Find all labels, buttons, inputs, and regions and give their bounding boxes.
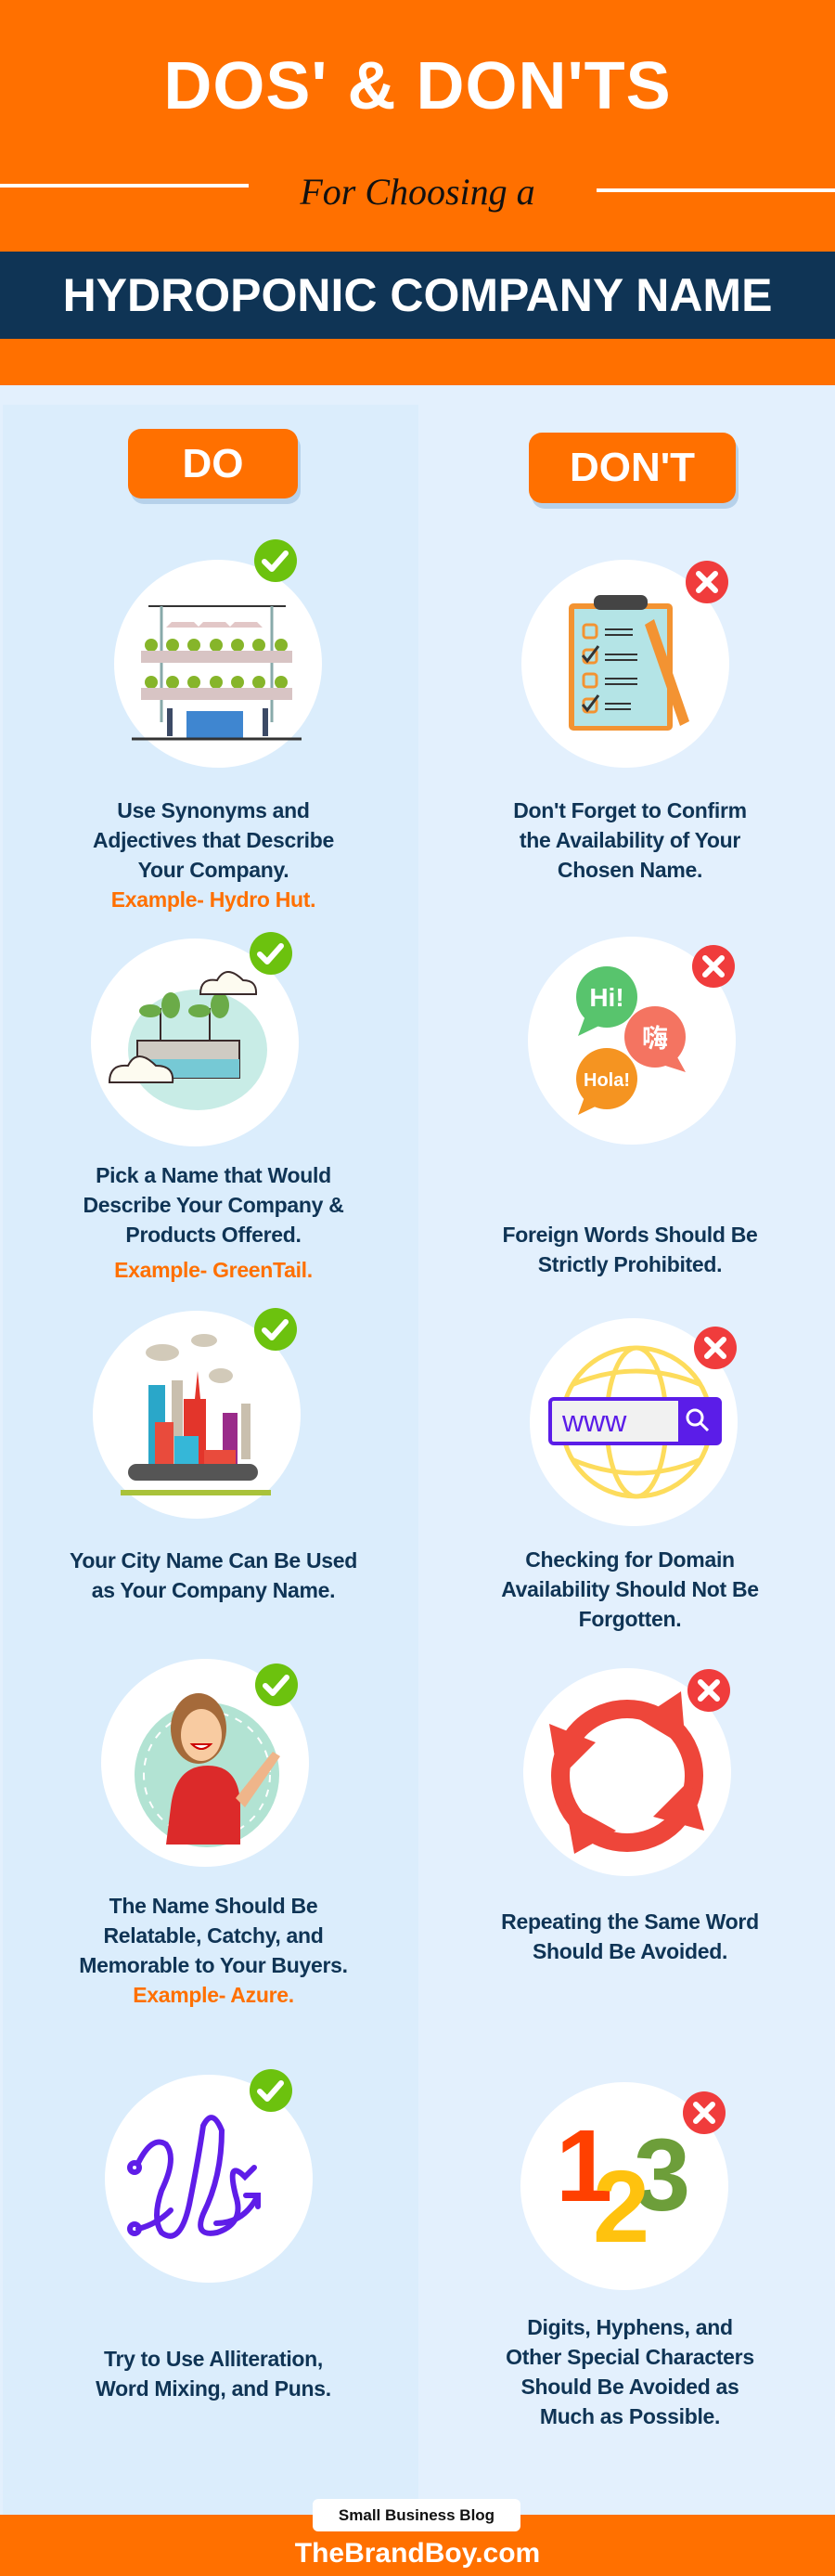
DON'T text 4: Repeating the Same Word [501,1909,759,1934]
DO text 5: Try to Use Alliteration, [104,2347,323,2371]
icon: speech bubbles: Hola! [584,1070,630,1091]
badge: cross [687,1669,730,1712]
DON'T label: DON'T [570,445,695,490]
DO label [128,429,298,498]
DON'T text 5: Much as Possible. [540,2404,720,2428]
icon: hydroponic rack [132,605,302,741]
DON'T text 5: Should Be Avoided as [520,2375,739,2399]
DON'T text 4 [501,1909,759,1963]
DO item 3: city [93,1308,301,1519]
DO text 4: The Name Should Be [109,1894,317,1918]
DON'T label [529,433,736,503]
icon: colorful digits 123: 3 [634,2118,690,2233]
DON'T text 3: Forgotten. [579,1607,681,1631]
DON'T item 5: 123 [520,2082,728,2290]
DON'T text 2: Strictly Prohibited. [538,1252,722,1276]
footer tab: Small Business Blog [313,2499,520,2531]
DO text 2: Pick a Name that Would [96,1163,331,1187]
badge: check [255,1663,298,1706]
footer [0,2515,835,2576]
DO text 1: Adjectives that Describe [93,828,334,852]
DON'T text 4: Should Be Avoided. [533,1939,727,1963]
left column background [3,405,418,2515]
navy band: HYDROPONIC COMPANY NAME [63,269,772,321]
DON'T item 1: clipboard [521,560,729,768]
badge: check [254,539,297,582]
navy band [0,252,835,339]
DON'T item 4: circular arrows [523,1668,731,1876]
header: orange banner [0,0,835,385]
DO item 4: woman thumbs up [101,1659,309,1867]
DON'T text 1: Chosen Name. [558,858,702,882]
badge: check [250,2069,292,2112]
icon: speech bubbles: 嗨 [642,1024,668,1053]
icon: city skyline [121,1334,271,1495]
DON'T text 5: Digits, Hyphens, and [527,2315,733,2339]
title: DOS' & DON'TS [163,49,672,123]
footer brand: TheBrandBoy.com [295,2538,540,2569]
DO text 3: Your City Name Can Be Used [70,1548,357,1573]
script subtitle: For Choosing a [300,171,535,213]
DON'T text 3: Checking for Domain [525,1547,735,1572]
DO text 1: Use Synonyms and [117,798,310,822]
DO text 2 [83,1163,344,1282]
DO text 5: Word Mixing, and Puns. [96,2376,331,2401]
icon: clipboard checklist [569,595,689,731]
icon: colorful digits 123: 1 [556,2109,612,2223]
DO text 2: Describe Your Company & [83,1193,344,1217]
DON'T text 1 [513,798,747,882]
DO text 2: Products Offered. [125,1223,302,1247]
badge: cross [694,1327,737,1369]
DON'T item 2: speech bubbles [528,937,736,1145]
badge: cross [692,945,735,988]
DO text 1: Your Company. [138,858,289,882]
DON'T text 3: Availability Should Not Be [501,1577,759,1601]
icon: globe with www search bar: www [561,1405,627,1438]
icon: colorful digits 123 [556,2109,690,2264]
icon: smiling woman [135,1693,280,1847]
DON'T text 3 [501,1547,759,1631]
DO text 5 [96,2347,331,2401]
DO item 1: hydroponic rack [114,539,322,768]
DO text 4: Relatable, Catchy, and [103,1923,324,1948]
DON'T text 1: Don't Forget to Confirm [513,798,747,822]
DO text 4: Memorable to Your Buyers. [79,1953,348,1977]
DO label: DO [182,441,243,486]
DON'T text 5 [506,2315,754,2428]
DON'T text 1: the Availability of Your [520,828,740,852]
DO text 3: as Your Company Name. [92,1578,335,1602]
DON'T text 2: Foreign Words Should Be [502,1223,758,1247]
DO item 5: squiggle arrows [105,2069,313,2283]
footer tab: Small Business Blog: Small Business Blog [339,2506,495,2524]
icon: globe with www search bar [548,1346,722,1498]
DO text 4: Example- Azure. [133,1983,294,2007]
DO text 1 [93,798,334,912]
icon: speech bubbles: Hi! [589,983,624,1012]
badge: cross [686,561,728,603]
badge: check [250,932,292,975]
DO text 1: Example- Hydro Hut. [111,887,315,912]
DO text 2: Example- GreenTail. [114,1258,313,1282]
icon: circular red arrows [549,1691,704,1854]
DON'T text 2 [502,1223,758,1276]
badge: check [254,1308,297,1351]
icon: speech bubbles [576,966,686,1115]
DO text 4 [79,1894,348,2007]
DO text 3 [70,1548,357,1602]
icon: colorful digits 123: 2 [593,2150,649,2264]
icon: purple squiggle [127,2115,261,2239]
DO item 2: plants [91,932,299,1146]
DON'T item 3: globe www [530,1318,738,1526]
DON'T text 5: Other Special Characters [506,2345,754,2369]
badge: cross [683,2091,726,2134]
icon: seedlings in water [109,971,267,1110]
